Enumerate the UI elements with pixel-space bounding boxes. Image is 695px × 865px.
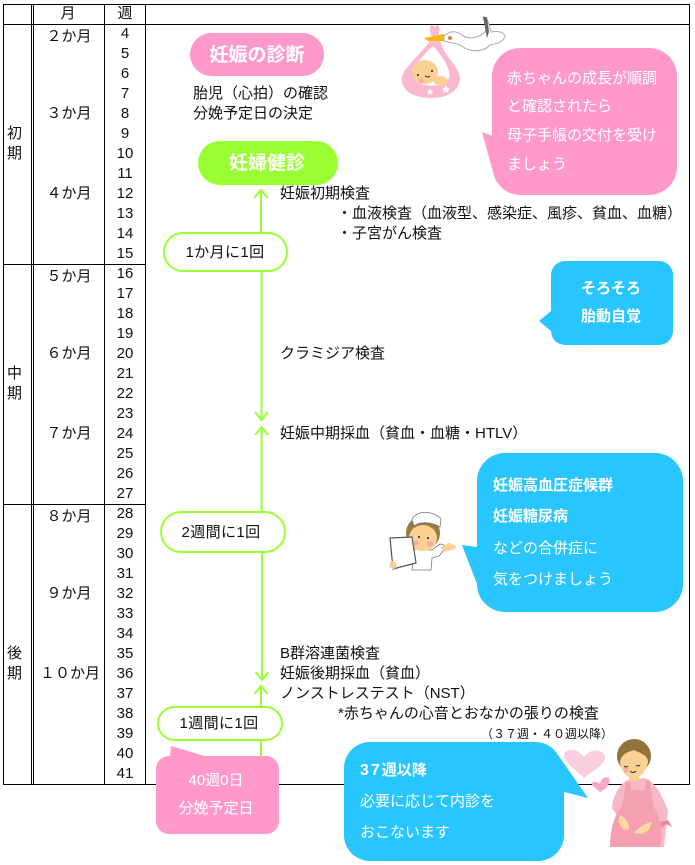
week column: 29: [117, 525, 133, 542]
week column: 30: [117, 545, 133, 562]
text: heartbeat and due date: 胎児（心拍）の確認: [193, 85, 328, 102]
month column: ４か月: [46, 185, 92, 202]
table header: 月: [60, 5, 76, 22]
callout: fetal movement: 胎動自覚: [581, 307, 641, 325]
week column: 7: [121, 85, 129, 102]
week column: 22: [117, 385, 133, 402]
icon: stork carrying baby: *: [442, 83, 450, 103]
week column: 33: [117, 605, 133, 622]
week column: 35: [117, 645, 133, 662]
week column: 34: [117, 625, 133, 642]
week column: 18: [117, 305, 133, 322]
week column: 13: [117, 205, 133, 222]
period labels: 初: [7, 125, 22, 142]
heading: pregnancy diagnosis: 妊娠の診断: [209, 44, 305, 66]
month column: ７か月: [46, 425, 92, 442]
week column: 6: [121, 65, 129, 82]
text: heartbeat and due date: [193, 85, 328, 122]
month column: ３か月: [46, 105, 92, 122]
week column: 36: [117, 665, 133, 682]
week column: 25: [117, 445, 133, 462]
icon: stork carrying baby: [402, 17, 505, 103]
callout: complications warning: [462, 453, 683, 612]
period labels: 中: [7, 365, 22, 382]
callout: internal exam after week 37: 37週以降: [360, 762, 427, 779]
callout: mother and child handbook: [482, 48, 677, 195]
arrows: visit timeline: [254, 190, 268, 757]
week column: 28: [117, 505, 133, 522]
icon: nurse with clipboard: [390, 512, 456, 570]
week column: 26: [117, 465, 133, 482]
month column: ８か月: [46, 508, 92, 525]
table header: [60, 5, 133, 22]
week column: 5: [121, 45, 129, 62]
table header: 週: [117, 5, 133, 22]
icon: stork carrying baby: *: [427, 86, 433, 103]
heading: pregnancy diagnosis: [190, 33, 324, 76]
text: late pregnancy tests: *赤ちゃんの心音とおなかの張りの検査: [338, 705, 599, 722]
text: early pregnancy tests: 妊娠初期検査: [280, 185, 370, 202]
month column: ２か月: [46, 28, 92, 45]
week column: 40: [117, 745, 133, 762]
week column: 11: [117, 165, 133, 182]
week column: 31: [117, 565, 133, 582]
callout: mother and child handbook: 母子手帳の交付を受け: [507, 127, 657, 144]
callout: fetal movement: [539, 261, 673, 345]
text: early pregnancy tests: ・子宮がん検査: [337, 225, 442, 242]
callout: complications warning: 妊娠糖尿病: [493, 507, 568, 525]
callout: internal exam after week 37: 必要に応じて内診を: [360, 793, 495, 810]
label: every two weeks: 2週間に1回: [181, 524, 261, 541]
text: early pregnancy tests: [280, 185, 682, 242]
callout: complications warning: 妊娠高血圧症候群: [493, 476, 613, 494]
week column: 41: [117, 765, 133, 782]
callout: due date: 40週0日: [188, 772, 244, 789]
text: late pregnancy tests: [280, 645, 613, 741]
week column: 37: [117, 685, 133, 702]
period labels: 期: [7, 385, 22, 402]
icon: pregnant woman in apron: [610, 739, 672, 847]
week column: 24: [117, 425, 133, 442]
week column: 14: [117, 225, 133, 242]
label: every two weeks: [161, 512, 285, 552]
text: late pregnancy tests: 妊娠後期採血（貧血）: [280, 665, 430, 682]
period labels: 後: [7, 645, 22, 662]
week column: 38: [117, 705, 133, 722]
callout: mother and child handbook: ましょう: [507, 156, 567, 173]
week column: 10: [117, 145, 133, 162]
text: early pregnancy tests: ・血液検査（血液型、感染症、風疹、貧血、血糖）: [337, 205, 682, 222]
week column: [117, 25, 133, 782]
period labels: 期: [7, 145, 22, 162]
period labels: 期: [7, 665, 22, 682]
callout: fetal movement: そろそろ: [581, 280, 641, 297]
week column: 9: [121, 125, 129, 142]
text: chlamydia test: クラミジア検査: [280, 345, 385, 362]
callout: due date: [156, 746, 279, 834]
heading: prenatal checkups: [198, 141, 338, 185]
week column: 23: [117, 405, 133, 422]
month column: [40, 28, 100, 682]
callout: complications warning: 気をつけましょう: [493, 571, 613, 588]
label: once a month: 1か月に1回: [185, 244, 265, 261]
month column: ６か月: [46, 345, 92, 362]
text: mid-pregnancy blood test: 妊娠中期採血（貧血・血糖・HTLV）: [280, 425, 527, 442]
callout: internal exam after week 37: おこないます: [360, 824, 450, 841]
month column: １０か月: [40, 665, 100, 682]
week column: 27: [117, 485, 133, 502]
callout: mother and child handbook: と確認されたら: [507, 98, 612, 115]
week column: 19: [117, 325, 133, 342]
week column: 15: [117, 245, 133, 262]
callout: complications warning: などの合併症に: [493, 540, 598, 557]
callout: internal exam after week 37: [344, 742, 588, 861]
text: heartbeat and due date: 分娩予定日の決定: [193, 105, 313, 122]
week column: 32: [117, 585, 133, 602]
month column: ５か月: [46, 268, 92, 285]
heading: prenatal checkups: 妊婦健診: [229, 152, 305, 174]
text: late pregnancy tests: ノンストレステスト（NST）: [280, 685, 475, 702]
label: once a month: [164, 233, 287, 271]
week column: 4: [121, 25, 129, 42]
text: late pregnancy tests: （３７週・４０週以降）: [481, 727, 613, 741]
week column: 8: [121, 105, 129, 122]
label: once a week: [158, 707, 282, 740]
label: once a week: 1週間に1回: [179, 715, 259, 732]
week column: 39: [117, 725, 133, 742]
callout: mother and child handbook: 赤ちゃんの成長が順調: [507, 70, 657, 87]
week column: 12: [117, 185, 133, 202]
callout: due date: 分娩予定日: [178, 800, 254, 817]
week column: 16: [117, 265, 133, 282]
week column: 20: [117, 345, 133, 362]
week column: 17: [117, 285, 133, 302]
month column: ９か月: [46, 585, 92, 602]
week column: 21: [117, 365, 133, 382]
period labels: [7, 125, 22, 682]
icon: hearts: [564, 750, 610, 792]
text: late pregnancy tests: B群溶連菌検査: [280, 645, 380, 662]
